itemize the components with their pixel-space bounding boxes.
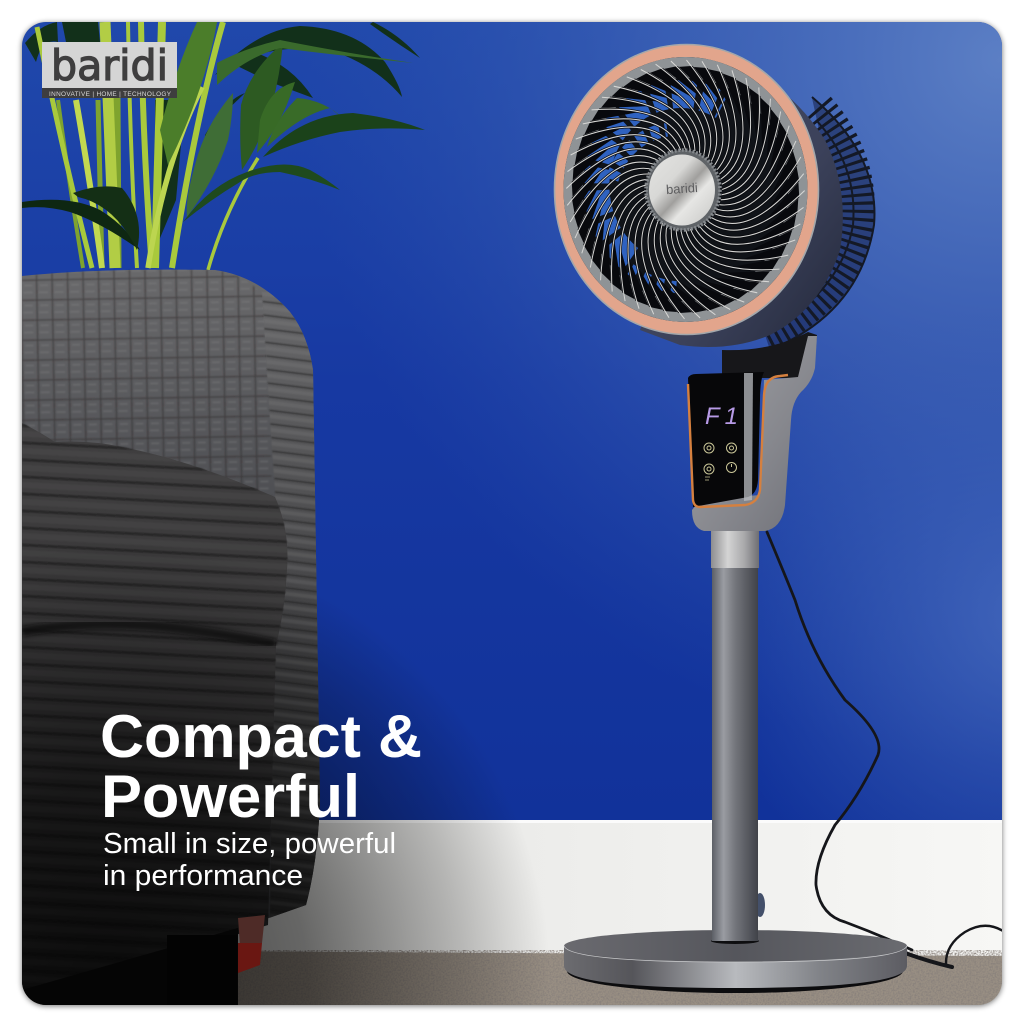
shadow beneath chair [22, 928, 238, 1006]
green leaves [160, 22, 425, 222]
control head [688, 336, 817, 531]
touch buttons [704, 443, 736, 480]
grille interior [564, 57, 808, 322]
F1 display: F 1 [705, 403, 738, 430]
subtitle: in performance [103, 860, 303, 892]
spiral blades [566, 60, 805, 320]
dark blade undersides [584, 80, 782, 296]
brand logo: INNOVATIVE | HOME | TECHNOLOGY [49, 91, 172, 98]
brick texture [22, 270, 272, 500]
front-left dark leaf [22, 186, 140, 250]
ribbed arm [262, 292, 320, 918]
brushed metal hub [646, 150, 720, 230]
fan housing [640, 98, 843, 347]
lime stems [37, 22, 258, 270]
brushed metal hub: baridi [666, 180, 698, 197]
copper trim [688, 375, 788, 507]
rose gold ring [554, 44, 818, 334]
blue wall [22, 22, 1002, 824]
neck bracket [722, 332, 817, 378]
headline: Compact & [100, 703, 422, 770]
white skirting board [238, 820, 1002, 956]
telescopic pole [711, 529, 759, 941]
brand logo: baridi [51, 41, 168, 90]
headline: Powerful [101, 763, 360, 830]
armchair [22, 270, 330, 1000]
floor fan [540, 32, 907, 993]
headline [100, 703, 422, 830]
power cord [767, 532, 1003, 967]
carpet [22, 950, 1002, 1006]
subtitle [103, 828, 396, 892]
rear grill [760, 97, 874, 350]
chair legs [167, 915, 265, 973]
height adjustment knob [758, 893, 765, 917]
black touch panel [688, 372, 764, 507]
subtitle: Small in size, powerful [103, 828, 396, 860]
panel reflection [744, 373, 753, 501]
armchair back panel [22, 270, 320, 1000]
mid-green stems [58, 95, 117, 268]
blue wall through grille [597, 94, 722, 287]
round base [564, 930, 907, 993]
fan face [554, 44, 820, 336]
headline and subtitle [100, 703, 422, 892]
grey blade band [573, 67, 798, 312]
potted plant [22, 22, 425, 270]
dark back leaves [25, 22, 420, 250]
left dark vignette [22, 592, 534, 1005]
seat cushion [22, 423, 288, 1000]
